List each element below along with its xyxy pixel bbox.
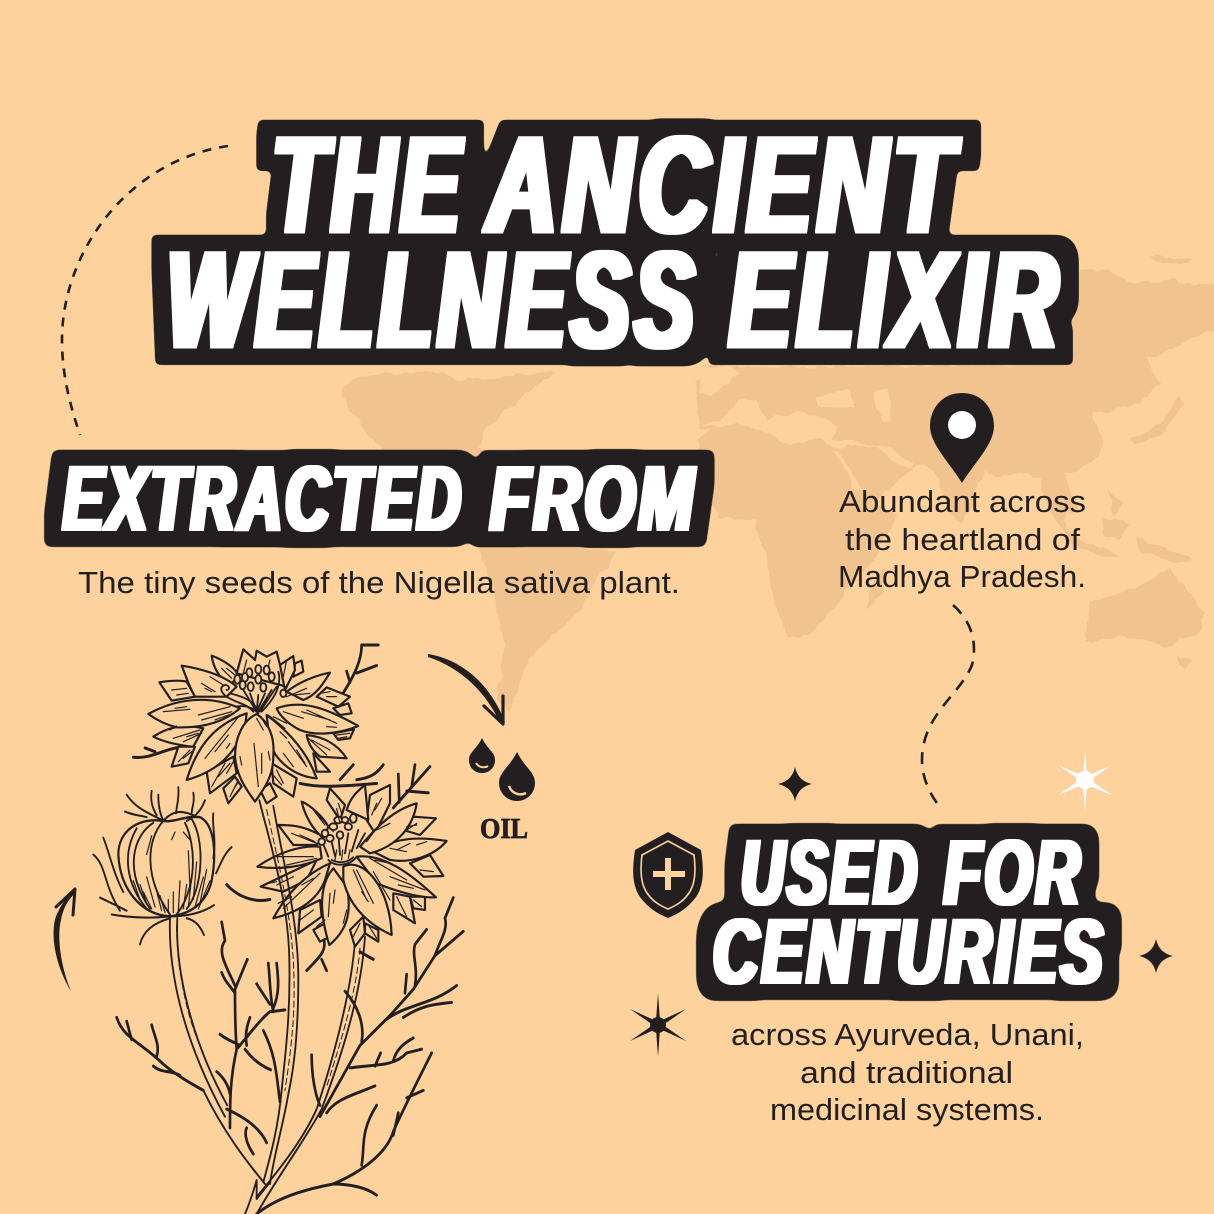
title: WELLNESS: [167, 224, 699, 377]
sparkle right: [1139, 939, 1173, 973]
icon: shield: [633, 832, 703, 918]
text: traditional systems: medicinal systems.: [770, 1092, 1044, 1127]
icon: map pin: [930, 393, 994, 483]
text: madhya pradesh: Abundant across: [839, 484, 1086, 519]
heading: extracted from: FROM: [490, 448, 697, 550]
title: ELIXIR: [729, 224, 1063, 377]
text: traditional systems: across Ayurveda, Unani,: [731, 1017, 1084, 1052]
stems, branches and seed pod: [93, 645, 463, 1214]
text: seeds description: The tiny seeds of the Nigella sativa plant.: [78, 565, 680, 600]
sparkle white: [1058, 750, 1112, 813]
arrow: up beside pod: [54, 889, 76, 991]
heading: extracted from: EXTRACTED: [63, 448, 464, 550]
title: THE: [272, 109, 465, 262]
text: traditional systems: [731, 1017, 1084, 1127]
text: traditional systems: and traditional: [800, 1055, 1013, 1090]
main flower stem: [259, 800, 298, 1184]
text: madhya pradesh: Madhya Pradesh.: [838, 559, 1086, 594]
dashed path: pin to centuries: [922, 605, 974, 808]
title: ANCIENT: [485, 109, 960, 262]
illustration: nigella sativa plant: [93, 645, 463, 1214]
sparkle: [778, 767, 812, 801]
dashed path: title to extracted: [62, 146, 228, 435]
sparkle dark: [630, 993, 686, 1057]
top flower: [148, 649, 358, 803]
heading: used for centuries: FOR: [944, 822, 1083, 924]
title: [167, 109, 1063, 377]
heading: used for centuries: [713, 822, 1106, 1003]
world map: [341, 257, 1214, 710]
heading: used for centuries: USED: [741, 822, 920, 924]
lower right flower: [257, 785, 447, 947]
text: madhya pradesh: the heartland of: [845, 522, 1080, 557]
text: madhya pradesh: [838, 484, 1086, 594]
arrow: down to oil: [428, 654, 505, 724]
icon: oil drops: [469, 738, 535, 801]
label: oil: OIL: [480, 813, 528, 845]
